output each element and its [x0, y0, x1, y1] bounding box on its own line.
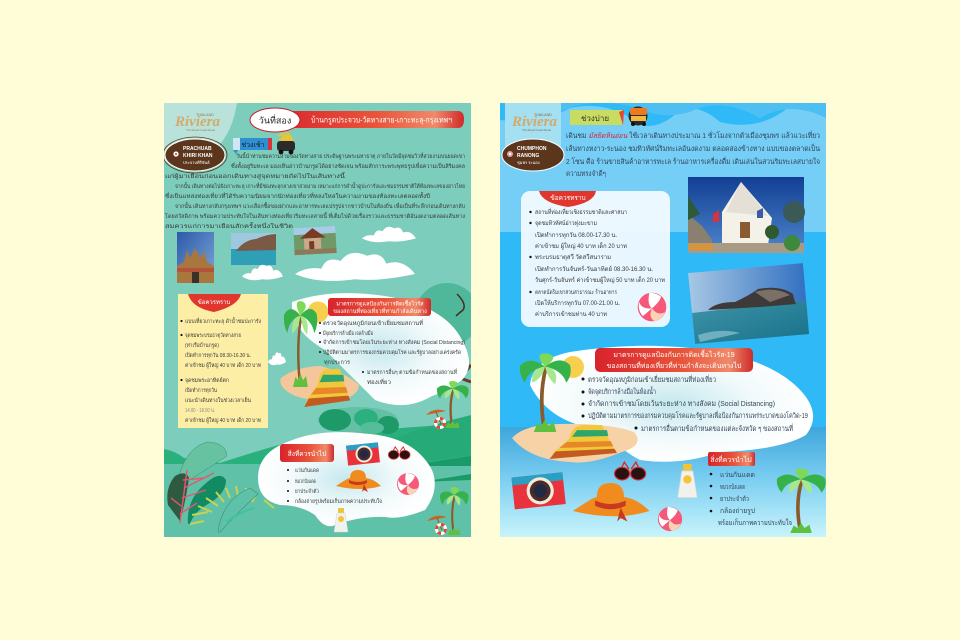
text block: intro: เดินชม มัสยิดหินอ่อน ใช้เวลาเดินทางประมาณ 1 ชั่วโมงจากตัวเมืองชุมพร แล้วแวะเที่ยว [566, 130, 820, 140]
ribbon: morning: ช่วงเช้า [241, 141, 265, 149]
panel: things to bring [258, 432, 435, 526]
text block: intro: 2 โซน คือ ร้านขายสินค้าอาหารทะเล ร้านอาหารเครื่องดื่ม เดินเล่นในสวนริมทะเลสบายใจ [566, 156, 820, 166]
heading: safety measures: ของสถานที่ท่องเที่ยวที่ท่านกำลังเดินทาง [333, 307, 427, 315]
icon: palm [520, 353, 571, 432]
panel: white safety blob [292, 293, 469, 405]
list: safety measures: มาตรการอื่นๆ ตามข้อกำหนดของสถานที่ [367, 368, 457, 376]
heading: safety measures [328, 298, 431, 316]
list: safety measures: ปฏิบัติตามมาตรการของกรมควบคุมโรคและรัฐบาลเพื่อป้องกันการแพร่ระบาดของโควิด-19 [588, 410, 808, 420]
sun [308, 302, 328, 322]
list: safety measures [319, 319, 465, 386]
text block: intro: สมควรแก่การมาเยือนสักครั้งหนึ่งในชีวิต [165, 222, 293, 230]
list: safety measures: มีจุดบริการล้างมือ เจลล้างมือ [323, 330, 373, 337]
panel: attractions: ค่าบริการเข้าชมท่าน 40 บาท [535, 310, 607, 318]
logo: Thailand Riviera: The Royal Coast Route [522, 128, 552, 132]
badge: Prachuap Khiri Khan: ประจวบคีรีขันธ์ [183, 160, 210, 165]
icon: life buoy lower [436, 524, 446, 534]
panel: attractions list: จุดชมพระบรมธาตุวัดทางสาย [185, 332, 241, 339]
ribbon: morning [233, 138, 272, 154]
icon: car [277, 133, 295, 154]
text block: intro: แก่ผู้มาเยือนก่อนออกเดินทางสู่จุดหมายถัดไปในเส้นทางนี้ [165, 172, 346, 180]
panel: things to bring: หมวกบังแดด [295, 478, 316, 485]
list: safety measures: ปฏิบัติตามมาตรการของกรมควบคุมโรค และรัฐบาลอย่างเคร่งครัด [323, 348, 461, 356]
panel: attractions: เปิดให้บริการทุกวัน 07.00-21.00 น. [535, 299, 620, 307]
panel: attractions list: 14.00 - 18.00 น. [185, 408, 215, 414]
photo: island at sea [688, 263, 809, 344]
title bar: วันที่สอง [259, 114, 291, 126]
list: things to bring: พร้อมเก็บภาพความประทับใจ [718, 518, 792, 527]
text block: intro: วันนี้นำท่านชมความงามของวัดทางสาย ประดิษฐานพระมหาธาตุ ภายในวัดมีจุดชมวิวที่สวยงามบนยอดเขา [236, 152, 465, 160]
list: safety measures: ท่องเที่ยว [367, 378, 391, 386]
panel: things to bring: สิ่งที่ควรนำไป [288, 449, 326, 458]
text block: intro [165, 152, 465, 230]
panel: attractions list: ข้อควรทราบ [198, 299, 231, 306]
icon: beach umbrella lower [427, 516, 447, 530]
list: things to bring: หมวกบังแดด [720, 483, 745, 491]
icon: camera [346, 442, 380, 466]
heading: things to bring: สิ่งที่ควรนำไป [710, 455, 752, 464]
icon: palm right [777, 469, 826, 533]
photo: rocky island [231, 233, 276, 265]
logo backdrop [164, 103, 237, 162]
icon: hat [573, 483, 650, 522]
heading: safety measures [595, 348, 753, 372]
heading: safety measures: มาตรการดูแลป้องกันการติดเชื้อไวรัส-19 [613, 348, 735, 359]
icon: striped towel [550, 425, 617, 459]
panel: attractions [521, 191, 670, 327]
sand island [512, 424, 638, 463]
list: safety measures: ตรวจวัดอุณหภูมิก่อนเข้าเยี่ยมชมสถานที่ [323, 319, 423, 327]
text block: intro: จากนั้น เดินทางต่อไปยังเกาะทะลุ เกาะที่มีช่องทะลุกลางเขาสวยงาม เหมาะแก่การดำน้ำดูปะการังและชมธรรมชาติใต้ท้องทะเลของอ่าวไทย [175, 182, 465, 190]
sea [500, 427, 826, 537]
text block: intro: จากนั้น เดินทางกลับกรุงเทพฯ แวะเลือกซื้อของฝากและอาหารทะเลแปรรูปจากชาวบ้านในท้องถิ่น เพื่อเป็นที่ระลึกก่อนเดินทางกลับ [175, 202, 465, 210]
icon: hat [336, 470, 381, 492]
panel: things to bring: กล้องถ่ายรูปพร้อมเก็บภาพความประทับใจ [295, 497, 382, 505]
hills [164, 283, 479, 537]
icon: sunscreen [678, 464, 697, 498]
logo: Thailand Riviera: THAILAND [196, 113, 214, 117]
panel: attractions: ค่าเข้าชม ผู้ใหญ่ 40 บาท เด็ก 20 บาท [535, 241, 627, 250]
panel: attractions: เปิดทำการทุกวัน 08.00-17.30 น. [535, 232, 617, 239]
text block: intro: เส้นทางหงาว-ระนอง ชมทิวทัศน์ริมทะเลอันงดงาม ตลอดสองข้างทาง แบบของตลาดเป็น [566, 143, 820, 153]
logo: Thailand Riviera: Riviera [511, 114, 557, 130]
list: safety measures: ทุกประการ [324, 359, 350, 366]
panel: attractions list: (ท่าเรือบ้านกรูด) [185, 342, 219, 349]
panel: left page Prachuap Khiri Khan [163, 103, 479, 537]
panel: things to bring: แว่นกันแดด [295, 467, 319, 474]
icon: sunglasses [615, 462, 646, 480]
sand island [280, 366, 359, 401]
panel: attractions list: จุดชมพระอาทิตย์ตก [185, 376, 229, 384]
panel: attractions: พระบรมธาตุสวี วัดสวีสนาราม [535, 253, 611, 261]
panel: attractions list: แนะนำเดินทางในช่วงเวลาเย็น [185, 396, 251, 404]
list: safety measures: จำกัดการเข้าชมโดยเว้นระยะห่าง ทางสังคม (Social Distancing) [588, 399, 775, 408]
list: safety measures: มาตรการอื่นตามข้อกำหนดของแต่ละจังหวัด ๆ ของสถานที่ [641, 423, 793, 433]
panel: attractions: ข้อควรทราบ [550, 194, 586, 202]
icon: tropical leaves [167, 442, 274, 532]
heading: safety measures: มาตรการดูแลป้องกันการติดเชื้อไวรัส [336, 300, 424, 308]
icon: camera [511, 472, 566, 509]
panel: right page Chumphon Ranong [500, 103, 826, 537]
text block: intro: ซึ่งตั้งอยู่ริมทะเล มองเห็นอ่าวบ้านกรูดได้อย่างชัดเจน พร้อมสักการะพระพุทธรูปเพื่อความเป็นสิริมงคล [231, 162, 465, 170]
badge: Chumphon Ranong: RANONG [517, 153, 539, 159]
panel: attractions: สถานที่ท่องเที่ยวเชิงธรรมชาติและศาสนา [535, 208, 627, 216]
logo backdrop [505, 103, 561, 148]
list: safety measures: จำกัดการเข้าชมโดยเว้นระยะห่าง ทางสังคม (Social Distancing) [323, 338, 465, 346]
list: things to bring: แว่นกันแดด [720, 471, 755, 479]
icon: beach ball [397, 473, 419, 495]
panel: attractions list: เปิดทำการทุกวัน 08.30-16.30 น. [185, 352, 251, 359]
logo: Thailand Riviera: THAILAND [534, 113, 552, 117]
sky clouds band [500, 104, 826, 232]
list: safety measures [582, 374, 808, 433]
text block: intro: ซึ่งเป็นแหล่งท่องเที่ยวที่ได้รับความนิยมจากนักท่องเที่ยวที่หลงใหลในความงามของท้องทะเลตลอดทั้งปี [165, 192, 430, 200]
icon: beach ball [638, 293, 666, 321]
badge: Chumphon Ranong [502, 139, 564, 171]
badge: Chumphon Ranong: ชุมพร ระนอง [517, 160, 540, 166]
icon: small palm upper [437, 381, 469, 428]
icon: life buoy upper [436, 418, 444, 428]
photo: white temple [688, 177, 805, 253]
icon: palm [284, 301, 317, 387]
sun [562, 356, 584, 378]
badge: Prachuap Khiri Khan: KHIRI KHAN [183, 153, 213, 159]
clouds [242, 227, 416, 365]
icon: beach ball [658, 507, 682, 531]
icon: small palm lower [440, 487, 468, 535]
panel: attractions list [178, 294, 268, 428]
badge: Chumphon Ranong: CHUMPHON [517, 146, 547, 152]
badge: Prachuap Khiri Khan [163, 137, 227, 173]
icon: striped towel [304, 369, 350, 407]
icon: sunscreen [334, 508, 348, 532]
text block: intro: โดยสวัสดิภาพ พร้อมความประทับใจในเส้นทางท่องเที่ยวริมทะเลสายนี้ ที่เต็มไปด้วยเรื่องราวและธรรมชาติอันงดงามตลอดเส้นทาง [165, 212, 465, 220]
bushes [318, 407, 399, 434]
panel: attractions: ตลาดนัดริมเขาสวนสาธารณะ ร้านอาหาร [535, 288, 617, 296]
logo: Thailand Riviera: Riviera [174, 114, 220, 130]
list: safety measures: จัดจุดบริการล้างมือในห้องน้ำ [588, 386, 656, 396]
heading: safety measures: ของสถานที่ท่องเที่ยวที่ท่านกำลังจะเดินทางไป [607, 361, 742, 370]
icon: beach umbrella upper [426, 410, 446, 424]
panel: attractions list: ค่าเข้าชม ผู้ใหญ่ 40 บาท เด็ก 20 บาท [185, 416, 261, 424]
panel: attractions list: เปิดทำการทุกวัน [185, 387, 217, 394]
icon: sunglasses [388, 447, 410, 459]
list: things to bring: ยาประจำตัว [720, 495, 749, 503]
text block: intro: ความทรงจำดีๆ [566, 169, 606, 178]
badge: Prachuap Khiri Khan: PRACHUAB [183, 146, 212, 152]
heading: things to bring [708, 452, 755, 466]
branches [456, 294, 471, 382]
title bar [250, 108, 464, 132]
panel: attractions: วันศุกร์-วันจันทร์ ค่าเข้าชมผู้ใหญ่ 50 บาท เด็ก 20 บาท [535, 275, 665, 284]
photo: temple [177, 232, 214, 283]
icon: tour bus [628, 106, 648, 126]
panel: attractions list: ค่าเข้าชม ผู้ใหญ่ 40 บาท เด็ก 20 บาท [185, 361, 261, 369]
logo: Thailand Riviera: The Royal Coast Route [186, 128, 216, 132]
text block: intro [566, 130, 820, 178]
panel: white safety blob [530, 346, 813, 462]
title bar: บ้านกรูดประจวบ-วัดทางสาย-เกาะทะลุ-กรุงเทพฯ [311, 116, 452, 126]
ribbon: afternoon: ช่วงบ่าย [581, 114, 609, 123]
list: things to bring [710, 471, 792, 527]
panel: things to bring: ยาประจำตัว [295, 488, 319, 495]
panel: attractions list: แบบเที่ยวเกาะทะลุ ดำน้ำชมปะการัง [185, 317, 261, 325]
panel: attractions: จุดชมทิวทัศน์อ่าวทุ่งมะขาม [535, 219, 597, 227]
list: safety measures: ตรวจวัดอุณหภูมิก่อนเข้าเยี่ยมชมสถานที่ท่องเที่ยว [588, 374, 716, 384]
photo: wooden house [293, 226, 337, 255]
ribbon: afternoon [570, 110, 624, 125]
list: things to bring: กล้องถ่ายรูป [720, 507, 756, 515]
panel: attractions: เปิดทำการวันจันทร์-วันอาทิตย์ 08.30-16.30 น. [535, 265, 653, 273]
